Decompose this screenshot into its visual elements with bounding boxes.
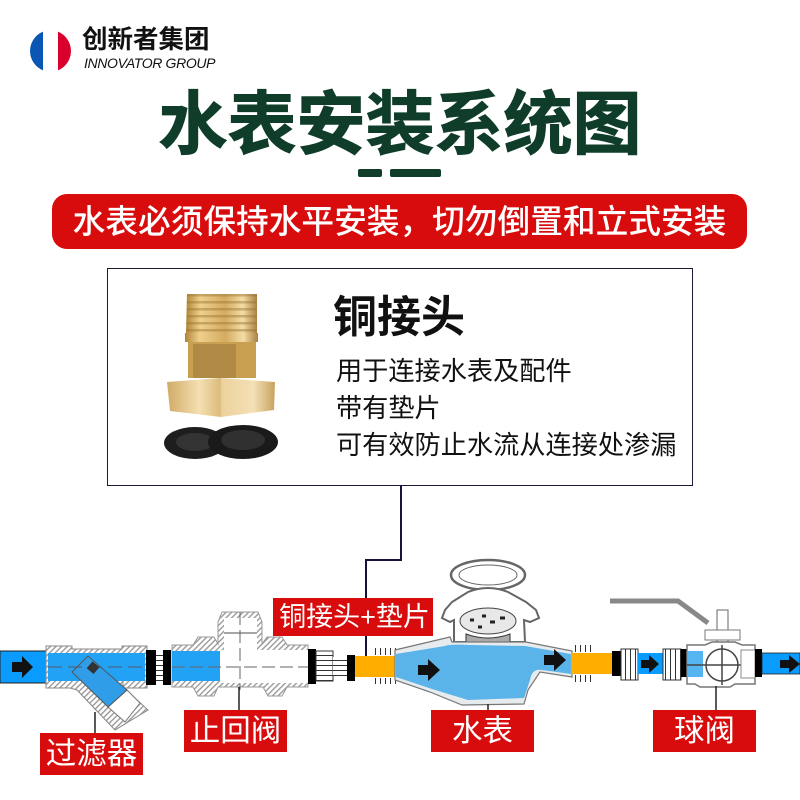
connector leader line (366, 485, 401, 656)
ball valve (610, 601, 762, 710)
label: check valve: 止回阀 (190, 714, 281, 748)
panel description (336, 356, 676, 460)
warning banner (52, 194, 747, 249)
panel description: 用于连接水表及配件 (336, 356, 572, 386)
meter dial (460, 608, 516, 634)
ball valve coupling (612, 649, 687, 680)
meter threads (573, 645, 595, 682)
label: connector and gasket: 铜接头+垫片 (279, 602, 430, 632)
water meter (395, 560, 595, 710)
label: ball valve: 球阀 (674, 714, 735, 748)
left orange gasket section (355, 648, 399, 684)
panel description: 带有垫片 (336, 393, 441, 423)
icon: French flag circle (30, 32, 71, 70)
label: water meter: 水表 (452, 714, 513, 748)
check valve (172, 612, 308, 710)
label: water meter (431, 710, 534, 752)
panel: brass connector (107, 268, 693, 486)
outlet pipe (762, 653, 800, 674)
meter head (442, 588, 539, 642)
label: strainer: 过滤器 (46, 737, 137, 771)
meter arrows (418, 649, 566, 681)
logo (30, 26, 216, 71)
panel heading: 铜接头 (333, 293, 465, 342)
meter lid (451, 560, 525, 590)
meter water (396, 645, 571, 700)
title: 水表安装系统图 (158, 86, 642, 163)
title underline (358, 169, 441, 177)
panel description: 可有效防止水流从连接处渗漏 (336, 430, 676, 460)
inlet pipe (0, 651, 48, 683)
company name in English: INNOVATOR GROUP (84, 55, 215, 71)
image: brass connector and gaskets (164, 294, 278, 459)
union nut (308, 649, 355, 684)
pipe coupling (146, 650, 171, 685)
warning banner: 水表必须保持水平安装，切勿倒置和立式安装 (73, 203, 726, 240)
company name: 创新者集团 (82, 26, 210, 54)
meter body (395, 637, 572, 705)
meter gears (466, 634, 510, 643)
strainer (46, 646, 148, 733)
label: ball valve (653, 710, 756, 752)
right orange gasket section (571, 653, 612, 674)
